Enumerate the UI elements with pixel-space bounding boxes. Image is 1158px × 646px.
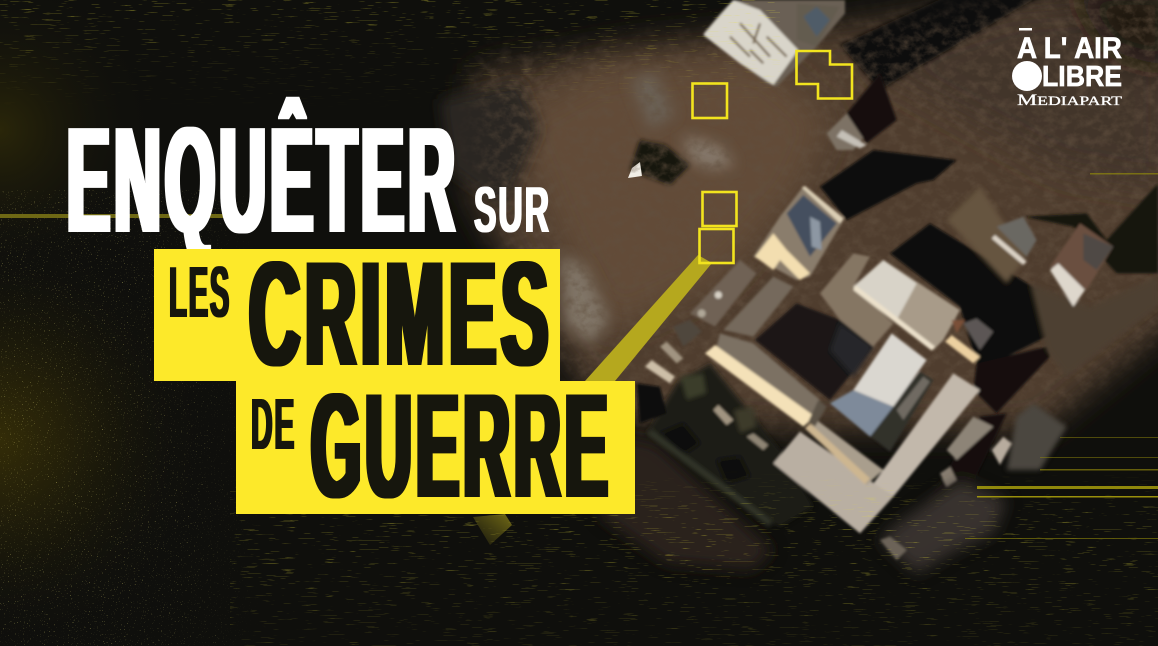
- yellow strip: [473, 255, 712, 545]
- target squares: [692, 51, 852, 263]
- title: enquêter sur: [67, 95, 551, 264]
- road lower left: [600, 430, 773, 570]
- title: les crimes de guerre: DE: [251, 385, 296, 465]
- orange block: [963, 318, 993, 350]
- top building: [703, 0, 845, 87]
- logo: à l'air libre mediapart: [1012, 28, 1123, 109]
- small blocks left: [645, 360, 675, 383]
- far right house: [1050, 223, 1113, 290]
- logo line: À L' AIR: A L' AIR: [1017, 32, 1122, 65]
- target stepped shape: [796, 51, 852, 98]
- logo circle: [1012, 61, 1042, 91]
- target square 1: [692, 84, 727, 118]
- light roof top: [853, 260, 960, 350]
- infographic canvas: GUERRE: [311, 362, 612, 529]
- shadows: [820, 150, 957, 220]
- terrain: [437, 0, 1158, 448]
- title: les crimes de guerre: CRIMES: [249, 230, 553, 397]
- logo line: LIBRE: LIBRE: [1042, 61, 1122, 93]
- courtyard: [755, 303, 873, 400]
- brown lands right: [1030, 277, 1158, 377]
- left roofs: [690, 260, 757, 327]
- title: enquêter sur: ENQUÊTER: [67, 95, 459, 264]
- L roof: [873, 373, 980, 497]
- main compound: [600, 150, 1158, 573]
- wing above crenellated bar: [717, 333, 820, 420]
- target square 3: [702, 192, 736, 226]
- vegetation: [647, 363, 813, 527]
- title: les crimes de guerre: [169, 230, 612, 529]
- bottom fading buildings: [880, 480, 1007, 573]
- small structures upper right: [827, 73, 897, 150]
- target square 4: [700, 229, 734, 263]
- corner building: [753, 187, 843, 280]
- title: les crimes de guerre: LES: [169, 253, 231, 333]
- logo line: MEDIAPART: M EDIAPART: [1017, 92, 1123, 109]
- satellite image of the site: [437, 0, 1158, 576]
- center roof: [867, 372, 933, 452]
- right buildings: [1007, 403, 1067, 470]
- word: SUR: SUR: [474, 173, 551, 246]
- crenellated cream bar: [705, 345, 815, 427]
- yellow title panel: [154, 249, 635, 514]
